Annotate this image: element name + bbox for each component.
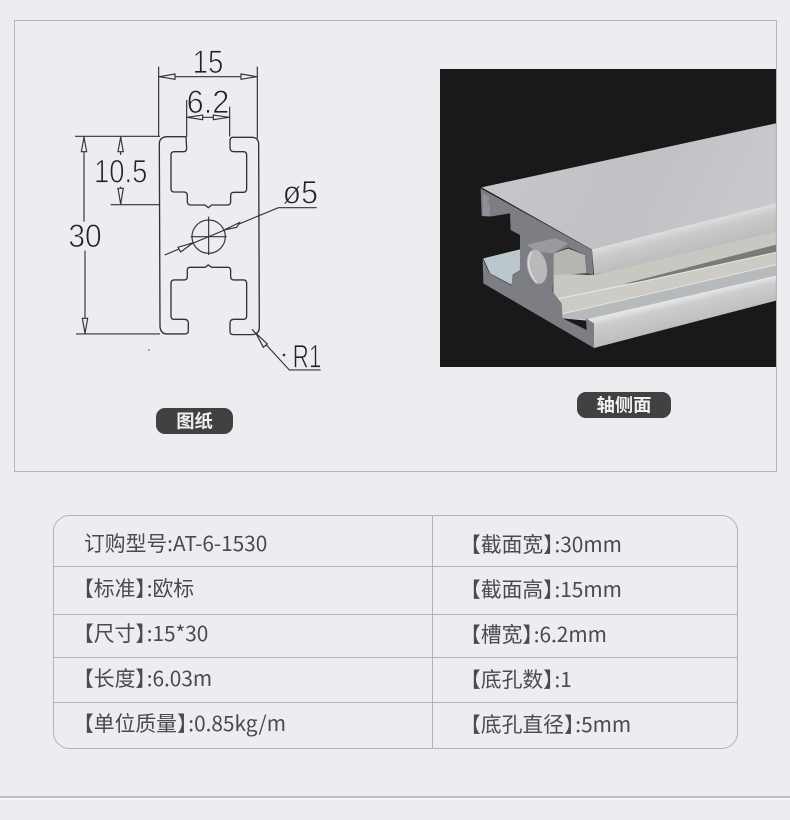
left column: 【长度】:6.03m [73, 662, 212, 692]
dark slit [623, 245, 776, 284]
lit band [563, 265, 776, 319]
right column: 【底孔直径】:5mm [460, 708, 631, 738]
panel: drawing and photo [14, 20, 776, 472]
right column: 【截面宽】:30mm [460, 528, 622, 558]
face highlights [527, 238, 568, 253]
technical drawing: 30 [68, 218, 102, 254]
dimension labels: 15 [193, 44, 223, 80]
left column: 【单位质量】:0.85kg/m [73, 707, 286, 737]
top face [482, 123, 776, 250]
label: drawing [156, 408, 233, 434]
specification table [54, 516, 738, 748]
cross-section face [481, 188, 594, 348]
center hole [191, 217, 227, 255]
dimension lines [75, 67, 321, 370]
lower lip [587, 276, 776, 348]
technical drawing: 6.2 [187, 84, 229, 120]
technical drawing [68, 44, 321, 375]
bore hole [524, 248, 550, 286]
table frame [54, 516, 738, 748]
technical drawing: 10.5 [94, 153, 147, 189]
label: drawing: 图纸 [176, 408, 213, 434]
label: axial side: 轴侧面 [597, 392, 651, 418]
label: axial side [577, 392, 671, 418]
upper lip [592, 203, 776, 275]
profile outline [159, 137, 259, 335]
right column: 【截面高】:15mm [460, 573, 622, 603]
dimension arrowheads [81, 74, 267, 347]
technical drawing: ø5 [283, 175, 318, 211]
right column [460, 528, 631, 738]
technical drawing: R1 [293, 339, 321, 375]
photo: aluminium profile on black [440, 69, 776, 367]
left column: 【标准】:欧标 [73, 572, 194, 602]
left column: 【尺寸】:15*30 [73, 617, 208, 647]
middle strip [558, 252, 776, 314]
channel base [553, 231, 776, 321]
right column: 【槽宽】:6.2mm [460, 618, 607, 648]
right column: 【底孔数】:1 [460, 663, 572, 693]
upper slot interior [553, 248, 587, 275]
footer divider [0, 796, 790, 800]
left column: 订购型号:AT-6-1530 [84, 527, 267, 557]
left column [73, 527, 286, 737]
lower left slot [483, 249, 520, 285]
